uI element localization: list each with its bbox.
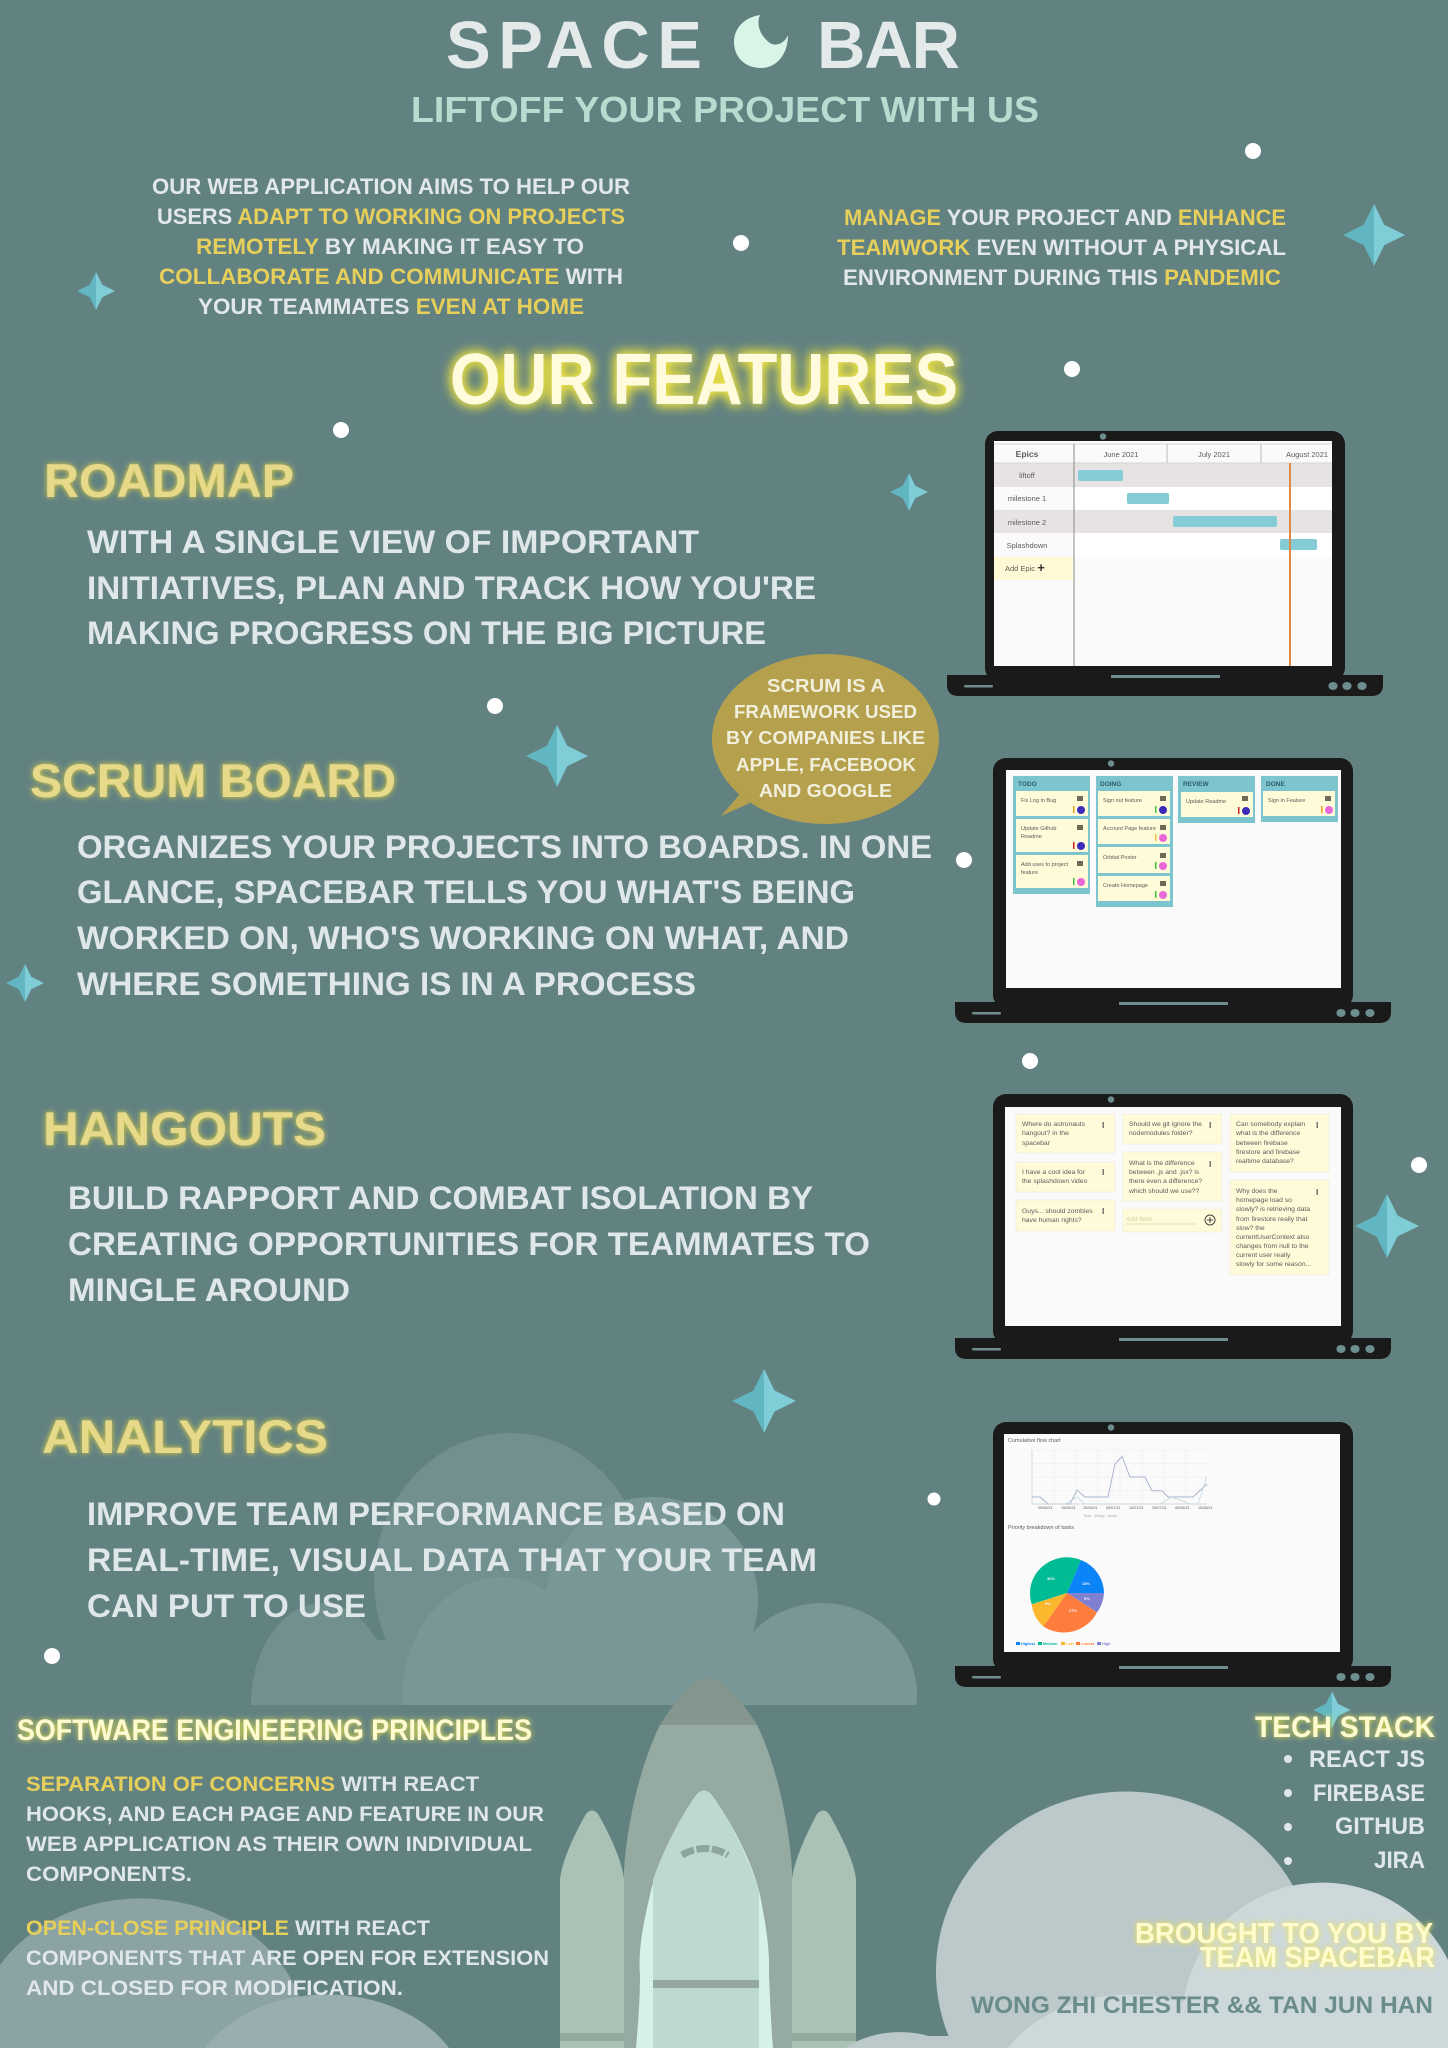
chart: priority pie chart: [1016, 1557, 1111, 1646]
intro text: left: OUR WEB APPLICATION AIMS TO HELP OUR: [152, 174, 630, 199]
laptop: hangouts screen: What is the difference: [1129, 1160, 1195, 1167]
intro text: right: TEAMWORK EVEN WITHOUT A PHYSICAL: [837, 235, 1286, 260]
laptop: scrum board screen: REVIEW: [1183, 781, 1210, 788]
chart: cumulative flow line chart: Todo - Doing - Done: [1083, 1514, 1117, 1518]
laptop: hangouts screen: Why does the: [1236, 1188, 1278, 1195]
rocket: cockpit window: [682, 1848, 728, 1855]
chart: priority pie chart: 27%: [1069, 1608, 1077, 1613]
bottom right clouds: [845, 1792, 1448, 2048]
rocket: left booster: [560, 1810, 624, 2048]
rocket: [560, 1678, 856, 2048]
rocket: shuttle glow: [636, 1790, 773, 2048]
text: roadmap description: [87, 524, 816, 651]
laptop: scrum board screen: DOING: [1100, 781, 1121, 788]
text: roadmap description: WITH A SINGLE VIEW OF IMPORTANT: [87, 524, 699, 560]
laptop: hangouts screen: [955, 1094, 1391, 1359]
text: roadmap description: MAKING PROGRESS ON THE BIG PICTURE: [87, 615, 766, 651]
heading: brought to you by team spacebar: [1135, 1918, 1435, 1974]
laptop: scrum board screen: TODO: [1018, 781, 1037, 788]
laptop: scrum board screen: Fix Log in Bug: [1021, 798, 1056, 804]
chart: priority pie chart: 9%: [1084, 1596, 1090, 1601]
heading: brought to you by team spacebar: TEAM SPACEBAR: [1200, 1942, 1435, 1974]
intro text: left: YOUR TEAMMATES EVEN AT HOME: [198, 294, 584, 319]
laptop: hangouts screen: from firestore really that: [1236, 1216, 1308, 1223]
text: scrum board description: GLANCE, SPACEBAR TELLS YOU WHAT'S BEING: [77, 874, 855, 910]
title: SPACE moon BAR: BAR: [817, 8, 960, 83]
intro text: left: USERS ADAPT TO WORKING ON PROJECTS: [157, 204, 625, 229]
chart: priority pie chart: 36%: [1047, 1576, 1055, 1581]
text: separation of concerns: [26, 1773, 544, 1886]
rocket: right booster: [792, 1810, 856, 2048]
text: scrum board description: [77, 829, 932, 1002]
laptop: analytics screen: [955, 1422, 1391, 1687]
laptop: roadmap screen: Splashdown: [1007, 541, 1047, 550]
heading: roadmap: ROADMAP: [44, 454, 294, 507]
chart: cumulative flow line chart: 05/08/21: [1175, 1506, 1190, 1510]
subtitle: LIFTOFF YOUR PROJECT WITH US: [411, 89, 1039, 130]
bottom left clouds: [0, 1898, 449, 2048]
laptop: hangouts screen: there even a difference?: [1129, 1178, 1202, 1185]
laptop: scrum board screen: Update Github: [1021, 826, 1056, 832]
list: tech stack: [1284, 1746, 1425, 1874]
text: team members: WONG ZHI CHESTER && TAN JUN HAN: [971, 1992, 1433, 2019]
chart: cumulative flow line chart: 25/07/21: [1152, 1506, 1167, 1510]
chart: cumulative flow line chart: 15/08/21: [1198, 1506, 1213, 1510]
laptop: scrum board screen: feature: [1021, 870, 1038, 876]
callout: scrum speech bubble: BY COMPANIES LIKE: [726, 728, 925, 748]
laptop: scrum board screen: Update Readme: [1186, 799, 1226, 805]
laptop: analytics screen: Cumulative flow chart: [1008, 1438, 1061, 1444]
text: roadmap description: INITIATIVES, PLAN AND TRACK HOW YOU'RE: [87, 570, 816, 606]
laptop: roadmap screen: liftoff: [1019, 471, 1036, 480]
laptop: hangouts screen: slow? the: [1236, 1225, 1265, 1232]
laptop: hangouts screen: hangout? in the: [1022, 1130, 1069, 1137]
text: analytics description: IMPROVE TEAM PERFORMANCE BASED ON: [87, 1496, 785, 1532]
rocket: shuttle body: [653, 1790, 759, 2048]
text: analytics description: CAN PUT TO USE: [87, 1588, 366, 1624]
text: scrum board description: WORKED ON, WHO'S WORKING ON WHAT, AND: [77, 920, 849, 956]
chart: priority pie chart: Medium: [1043, 1642, 1058, 1646]
heading: our features: OUR FEATURES: [450, 340, 958, 420]
stars: white dots: [44, 143, 1427, 1664]
chart: priority pie chart: High: [1102, 1642, 1111, 1646]
rocket: nose cone: [660, 1678, 757, 1725]
text: open-close principle: COMPONENTS THAT ARE OPEN FOR EXTENSION: [26, 1947, 549, 1970]
laptop: scrum board screen: Readme: [1021, 834, 1042, 840]
laptop: roadmap screen: August 2021: [1286, 450, 1328, 459]
laptop: hangouts screen: currentUserContext also: [1236, 1234, 1310, 1241]
laptop: hangouts screen: between .js and .jsx? is: [1129, 1169, 1200, 1176]
chart: priority pie chart: Low: [1066, 1642, 1074, 1646]
laptop: hangouts screen: firestore and firebase: [1236, 1149, 1300, 1156]
heading: tech stack: TECH STACK: [1255, 1711, 1435, 1744]
laptop: scrum board screen: [955, 758, 1391, 1023]
callout: scrum speech bubble: AND GOOGLE: [759, 781, 892, 801]
text: separation of concerns: COMPONENTS.: [26, 1863, 192, 1886]
text: scrum board description: ORGANIZES YOUR PROJECTS INTO BOARDS. IN ONE: [77, 829, 932, 865]
callout: scrum speech bubble: APPLE, FACEBOOK: [736, 755, 916, 775]
intro text: right: ENVIRONMENT DURING THIS PANDEMIC: [843, 265, 1281, 290]
laptop: hangouts screen: Add item: [1126, 1216, 1152, 1223]
list: tech stack: JIRA: [1374, 1847, 1425, 1874]
laptop: hangouts screen: what is the difference: [1235, 1130, 1300, 1137]
laptop: roadmap screen: June 2021: [1103, 450, 1139, 459]
chart: cumulative flow line chart: 05/07/21: [1106, 1506, 1121, 1510]
laptop: scrum board screen: Sign in Feature: [1268, 798, 1305, 804]
text: analytics description: [87, 1496, 817, 1624]
chart: cumulative flow line chart: [1032, 1450, 1213, 1518]
text: open-close principle: AND CLOSED FOR MODIFICATION.: [26, 1977, 403, 2000]
chart: priority pie chart: 9%: [1045, 1601, 1051, 1606]
chart: cumulative flow line chart: 25/06/21: [1083, 1506, 1098, 1510]
laptop: roadmap screen: milestone 2: [1008, 518, 1046, 527]
laptop: roadmap screen: Add Epic: [1005, 564, 1035, 573]
chart: priority pie chart: 18%: [1082, 1581, 1090, 1586]
chart: cumulative flow line chart: 15/06/21: [1061, 1506, 1076, 1510]
text: analytics description: REAL-TIME, VISUAL DATA THAT YOUR TEAM: [87, 1542, 817, 1578]
intro text: left: REMOTELY BY MAKING IT EASY TO: [196, 234, 584, 259]
heading: hangouts: HANGOUTS: [43, 1102, 326, 1155]
callout: scrum speech bubble: SCRUM IS A: [767, 676, 885, 696]
laptop: roadmap screen: +: [1037, 560, 1045, 575]
laptop: hangouts screen: which should we use??: [1128, 1188, 1199, 1195]
text: hangouts description: MINGLE AROUND: [68, 1272, 350, 1308]
text: separation of concerns: HOOKS, AND EACH PAGE AND FEATURE IN OUR: [26, 1803, 544, 1826]
laptop: roadmap screen: [947, 431, 1383, 696]
rocket: shuttle stripe: [653, 1980, 759, 1988]
laptop: scrum board screen: Create Homepage: [1103, 883, 1148, 889]
intro text: right: [837, 205, 1286, 290]
laptop: hangouts screen: Where do astronauts: [1022, 1121, 1086, 1128]
rocket: main body: [624, 1725, 792, 2048]
text: hangouts description: BUILD RAPPORT AND COMBAT ISOLATION BY: [68, 1180, 813, 1216]
text: scrum board description: WHERE SOMETHING IS IN A PROCESS: [77, 966, 696, 1002]
laptop: hangouts screen: realtime database?: [1236, 1158, 1294, 1165]
chart: priority pie chart: Highest: [1021, 1642, 1036, 1646]
laptop: scrum board screen: Sign out feature: [1103, 798, 1142, 804]
list: tech stack: FIREBASE: [1313, 1780, 1425, 1807]
laptop: hangouts screen: homepage load so: [1236, 1197, 1292, 1204]
background clouds behind the rocket: [251, 1433, 917, 1705]
sparkles: [6, 204, 1419, 1728]
laptop: hangouts screen: between firebase: [1236, 1140, 1288, 1147]
text: separation of concerns: SEPARATION OF CONCERNS WITH REACT: [26, 1773, 479, 1796]
list: tech stack: GITHUB: [1335, 1813, 1425, 1840]
text: hangouts description: [68, 1180, 870, 1308]
intro text: left: [152, 174, 630, 319]
heading: brought to you by team spacebar: BROUGHT TO YOU BY: [1135, 1918, 1433, 1950]
laptop: hangouts screen: nodemodules folder?: [1129, 1130, 1193, 1137]
laptop: roadmap screen: milestone 1: [1008, 494, 1046, 503]
laptop: hangouts screen: current user really: [1236, 1252, 1291, 1259]
list: tech stack: REACT JS: [1309, 1746, 1425, 1773]
text: separation of concerns: WEB APPLICATION AS THEIR OWN INDIVIDUAL: [26, 1833, 532, 1856]
chart: priority pie chart: Lowest: [1081, 1642, 1095, 1646]
intro text: left: COLLABORATE AND COMMUNICATE WITH: [159, 264, 623, 289]
laptop: analytics screen: Priority breakdown of tasks: [1008, 1525, 1074, 1531]
title: SPACE moon BAR: SPACE: [446, 8, 702, 83]
heading: software engineering principles: SOFTWARE ENGINEERING PRINCIPLES: [17, 1714, 532, 1747]
title: SPACE moon BAR: [446, 8, 960, 83]
laptop: roadmap screen: July 2021: [1198, 450, 1230, 459]
laptop: scrum board screen: DONE: [1266, 781, 1285, 788]
heading: scrum board: SCRUM BOARD: [30, 754, 396, 807]
laptop: hangouts screen: have human rights?: [1022, 1217, 1082, 1224]
heading: analytics: ANALYTICS: [42, 1410, 328, 1463]
laptop: scrum board screen: Add uses to project: [1021, 862, 1069, 868]
intro text: right: MANAGE YOUR PROJECT AND ENHANCE: [844, 205, 1286, 230]
text: open-close principle: OPEN-CLOSE PRINCIPLE WITH REACT: [26, 1917, 430, 1940]
laptop: hangouts screen: slowly? is retrieving data: [1236, 1206, 1310, 1213]
laptop: hangouts screen: Should we git ignore the: [1129, 1121, 1202, 1128]
laptop: hangouts screen: changes from null to the: [1236, 1243, 1309, 1250]
laptop: hangouts screen: spacebar: [1022, 1140, 1051, 1147]
icon: crescent moon: [734, 15, 788, 68]
laptop: scrum board screen: Account Page feature: [1103, 826, 1156, 832]
laptop: hangouts screen: slowly for some reason...: [1236, 1261, 1311, 1268]
laptop: hangouts screen: the splashdown video: [1022, 1178, 1088, 1185]
rocket: booster stripes: [560, 2033, 856, 2041]
laptop: roadmap screen: Epics: [1016, 449, 1039, 459]
laptop: hangouts screen: Guys... should zombies: [1022, 1208, 1093, 1215]
callout: scrum speech bubble: FRAMEWORK USED: [734, 702, 917, 722]
chart: cumulative flow line chart: 05/06/21: [1038, 1506, 1053, 1510]
text: hangouts description: CREATING OPPORTUNITIES FOR TEAMMATES TO: [68, 1226, 870, 1262]
laptop: hangouts screen: I have a cool idea for: [1022, 1169, 1086, 1176]
text: open-close principle: [26, 1917, 549, 2000]
callout: scrum speech bubble: [712, 654, 939, 824]
chart: cumulative flow line chart: 15/07/21: [1129, 1506, 1144, 1510]
laptop: hangouts screen: Can somebody explain: [1236, 1121, 1305, 1128]
laptop: scrum board screen: Orbital Poster: [1103, 855, 1137, 861]
